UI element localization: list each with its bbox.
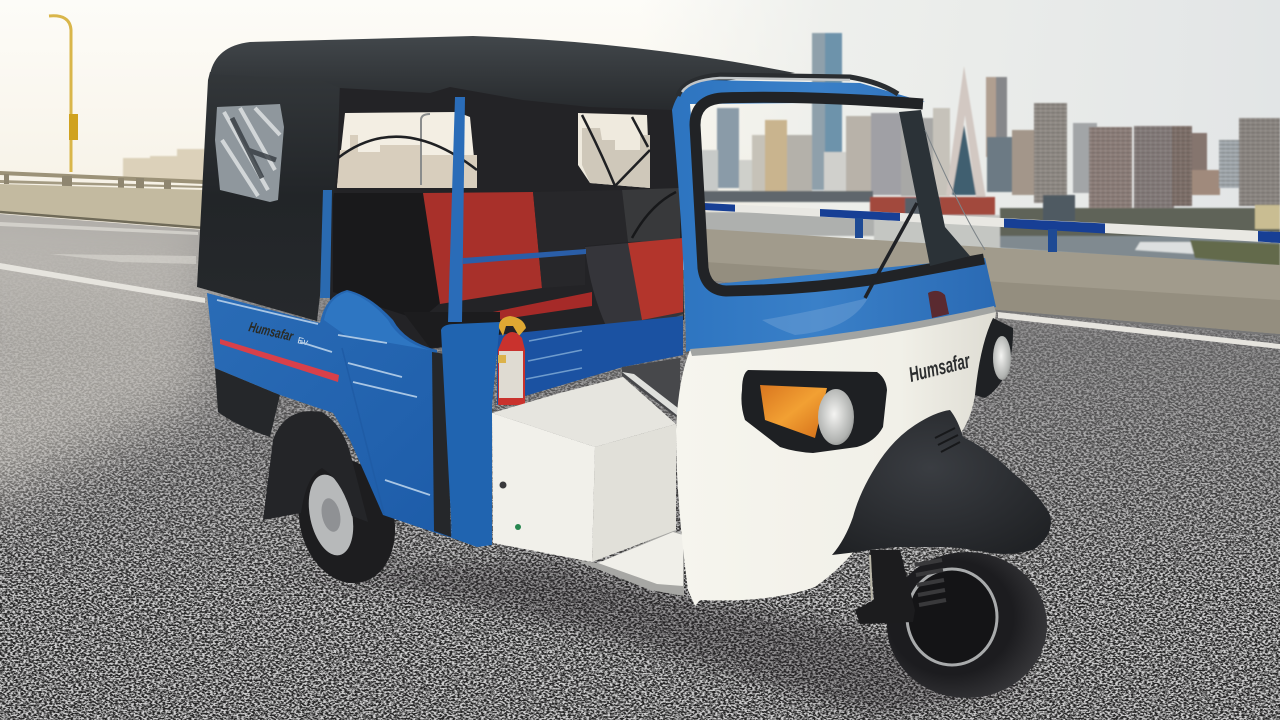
front mudguard	[832, 410, 1051, 555]
river-front base	[1000, 208, 1280, 242]
road lane markings	[0, 222, 1280, 349]
black door strip	[432, 352, 451, 537]
low pier below rail	[704, 212, 874, 236]
cowl reflections	[762, 298, 868, 335]
front suspension	[855, 550, 946, 624]
red bridge section	[870, 197, 995, 215]
body trim lines	[217, 300, 430, 495]
left guard rail	[0, 171, 204, 190]
front badge	[928, 291, 949, 318]
side red stripe	[220, 339, 339, 382]
city skyline right	[700, 33, 1280, 268]
left concrete barrier	[0, 184, 204, 228]
headlamp	[741, 370, 887, 453]
sky	[0, 0, 1280, 270]
street lamp	[49, 16, 78, 172]
floor step	[575, 530, 684, 596]
rear bumper	[215, 368, 280, 437]
rear body panel	[207, 290, 452, 538]
bench seat red	[423, 192, 542, 304]
rear curtain post	[320, 190, 332, 298]
lamp post through window	[421, 114, 430, 185]
blue and white handrail	[704, 203, 1280, 252]
folded seat	[585, 238, 683, 332]
right window view	[578, 113, 650, 188]
canopy roof	[210, 36, 795, 110]
seat cushion black	[403, 312, 500, 348]
front wheel	[887, 552, 1047, 698]
front white body	[676, 310, 996, 606]
side panel right	[622, 188, 680, 242]
center pillar	[441, 322, 500, 547]
interior hoop	[632, 192, 676, 238]
road	[0, 200, 1280, 720]
auto rickshaw	[197, 36, 1051, 698]
windscreen pillar	[899, 110, 970, 266]
distant city skyline left	[123, 149, 205, 181]
blue roof pillar	[448, 97, 465, 322]
cable-stayed bridge pylon	[946, 66, 987, 205]
arch highlight	[324, 292, 430, 350]
blue cowl	[672, 80, 996, 352]
rear wheel	[286, 449, 408, 593]
buildings through rear window	[337, 135, 477, 188]
buildings through right window	[582, 128, 650, 188]
rear wheel arch	[263, 411, 368, 522]
white ship	[1135, 242, 1200, 254]
water	[1000, 236, 1280, 268]
front brand logo: Humsafar	[907, 349, 973, 387]
seat base red	[463, 292, 592, 324]
building window texture	[1034, 103, 1280, 212]
top chrome roof rim	[678, 75, 898, 96]
side brand: Humsafar	[247, 318, 296, 344]
tall tower	[812, 33, 842, 190]
cabin interior	[330, 75, 684, 350]
seat grab rail	[463, 249, 586, 264]
side indicator lamp	[975, 318, 1013, 398]
panel crease	[342, 348, 384, 514]
right concrete barrier	[706, 229, 1280, 334]
footwell step	[622, 358, 680, 420]
seat back dark right	[533, 190, 628, 288]
battery box	[492, 377, 676, 562]
ground shadow	[270, 562, 1040, 716]
rail bridge	[703, 191, 873, 202]
side model badge: Ev	[297, 335, 310, 347]
rear curtain	[197, 72, 340, 321]
rear window view	[337, 112, 477, 188]
windscreen frame	[695, 97, 984, 291]
window hoops	[338, 115, 650, 186]
mid side panel	[497, 316, 683, 405]
wiper	[865, 203, 917, 298]
fire extinguisher	[498, 316, 526, 405]
chrome trim	[690, 306, 996, 356]
seat black left	[333, 193, 440, 320]
curtain window	[215, 104, 284, 202]
window wire	[925, 130, 985, 250]
